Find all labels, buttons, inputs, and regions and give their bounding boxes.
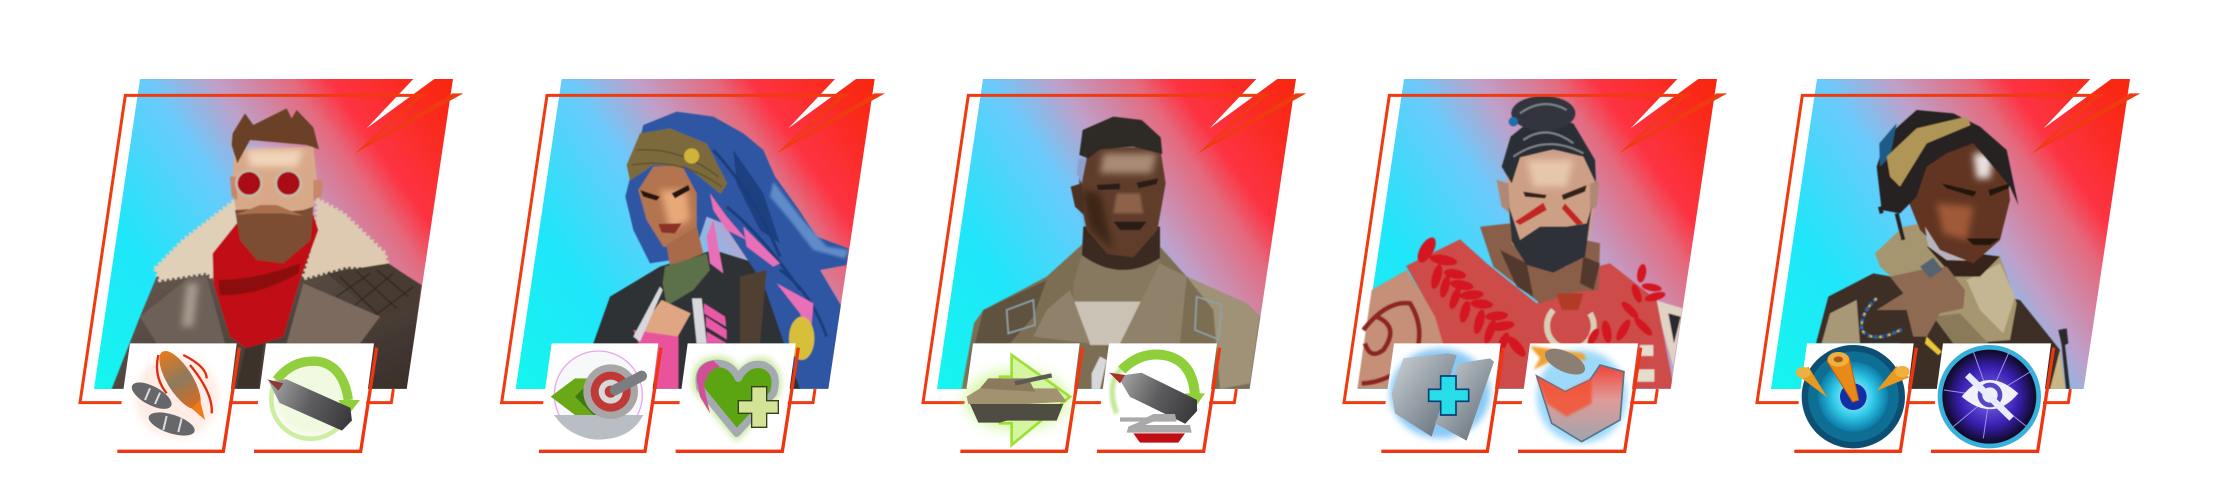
skill tile 1: armor repair — [1379, 343, 1503, 451]
skill tile 2: shell striking shield — [1516, 343, 1641, 451]
skill tile 2: shell and tank gun reload — [1095, 343, 1220, 451]
panel: character 3, soldier in olive jacket — [923, 79, 1306, 451]
skill tile 1: bullets on target disk — [1792, 343, 1916, 451]
panel: character 4, tattooed warrior — [1344, 79, 1727, 451]
skill tile 2: fast reload — [252, 343, 377, 451]
skill tile 1: tank with arrow — [958, 343, 1082, 451]
panel: character 2, woman with blue hair — [502, 79, 885, 451]
gradient backdrop — [516, 79, 875, 389]
panel: character 5, woman with teddy bear — [1757, 79, 2140, 451]
frame outline with spark — [502, 93, 885, 403]
gradient backdrop — [937, 79, 1296, 389]
portrait: warrior with topknot — [1357, 96, 1683, 389]
gradient backdrop — [1771, 79, 2130, 389]
frame outline with spark — [1757, 93, 2140, 403]
portrait: bearded man in red glasses — [112, 108, 422, 389]
portrait: soldier — [962, 117, 1260, 389]
frame outline with spark — [1344, 93, 1727, 403]
frame outline with spark — [80, 93, 463, 403]
frame outline with spark — [923, 93, 1306, 403]
portrait: woman with braids and headband — [1816, 110, 2070, 389]
skill tile 2: crossed-out eye — [1929, 343, 2054, 451]
skill tile 1: penetrating shells — [115, 343, 239, 451]
gradient backdrop — [94, 79, 453, 389]
panel: character 1, bearded pilot — [80, 79, 463, 451]
gradient backdrop — [1358, 79, 1717, 389]
skill tile 1: target with chevrons — [537, 343, 661, 451]
portrait: blue-haired woman in beanie — [593, 112, 848, 389]
skill tile 2: green heart with plus — [673, 343, 798, 451]
